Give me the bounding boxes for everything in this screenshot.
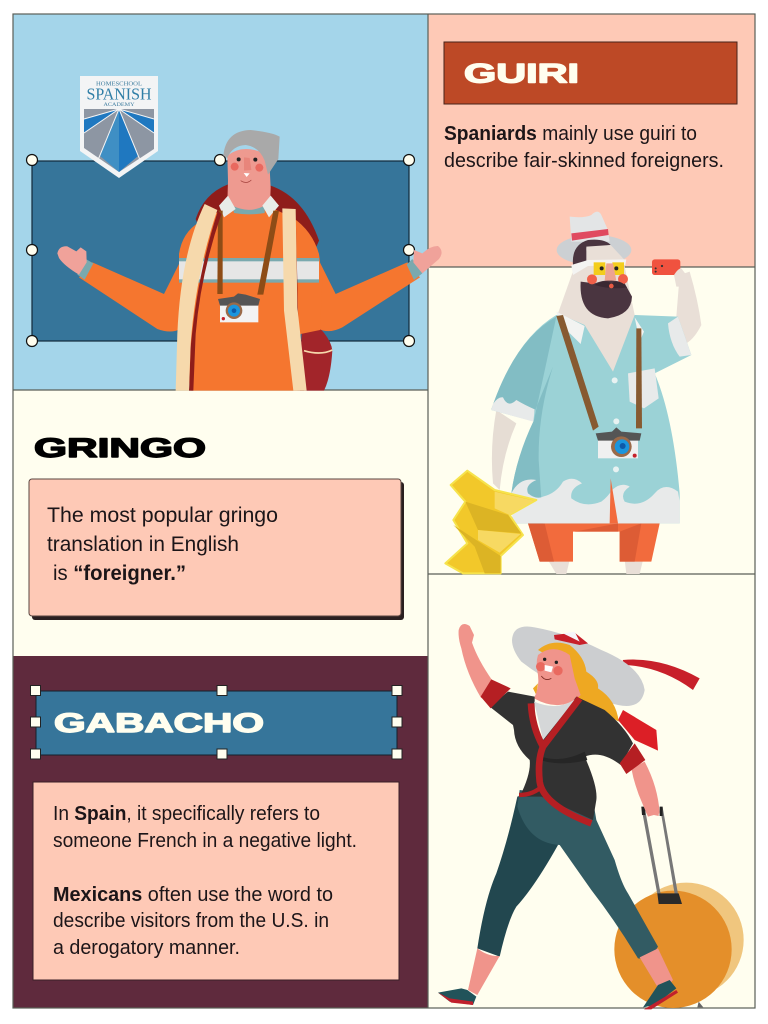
logo: Homeschool Spanish Academy shield: SPANISH	[86, 84, 152, 104]
panel: gabacho description card: a derogatory manner.	[53, 937, 240, 959]
text: guiri description: Spaniards mainly use guiri to	[444, 123, 697, 145]
heading: GUIRI: GUIRI	[464, 58, 579, 88]
selected blue rectangle with handles	[26, 154, 414, 346]
panel: woman illustration background	[428, 574, 755, 1008]
illustration: woman with wide hat and suitcase	[438, 624, 744, 1009]
heading: GABACHO with selection handles	[30, 686, 402, 759]
panel: guiri illustration background	[428, 267, 755, 574]
logo: Homeschool Spanish Academy shield	[80, 76, 158, 178]
panel: gabacho description card	[33, 782, 399, 980]
illustration: bearded tourist taking selfie	[445, 212, 701, 574]
panel: guiri peach background	[428, 14, 755, 267]
panel: gabacho description card: someone French in a negative light.	[53, 830, 357, 852]
panel: gabacho background	[13, 656, 428, 1008]
text: guiri description: describe fair-skinned foreigners.	[444, 150, 724, 172]
heading: GRINGO: GRINGO	[34, 433, 206, 463]
heading: GABACHO with selection handles: GABACHO	[54, 708, 264, 738]
panel: sky blue illustration background	[13, 14, 428, 390]
logo: Homeschool Spanish Academy shield: ACADEMY	[104, 102, 135, 108]
illustration: tourist with backpack and camera	[57, 130, 442, 391]
panel: gabacho description card: Mexicans often use the word to	[53, 884, 333, 906]
panel: gringo translation card	[29, 479, 404, 620]
panel: gringo translation card: translation in English	[47, 532, 239, 556]
panel: gabacho description card: In Spain, it specifically refers to	[53, 803, 320, 825]
panel: gabacho description card: describe visitors from the U.S. in	[53, 910, 329, 932]
panel: gringo translation card: The most popular gringo	[47, 503, 278, 527]
text: guiri description	[444, 123, 724, 172]
logo: Homeschool Spanish Academy shield: HOMESCHOOL	[96, 82, 142, 88]
panel: gringo background	[13, 390, 428, 656]
panel: gringo translation card: is “foreigner.”	[53, 561, 186, 585]
heading: GUIRI	[444, 42, 737, 104]
